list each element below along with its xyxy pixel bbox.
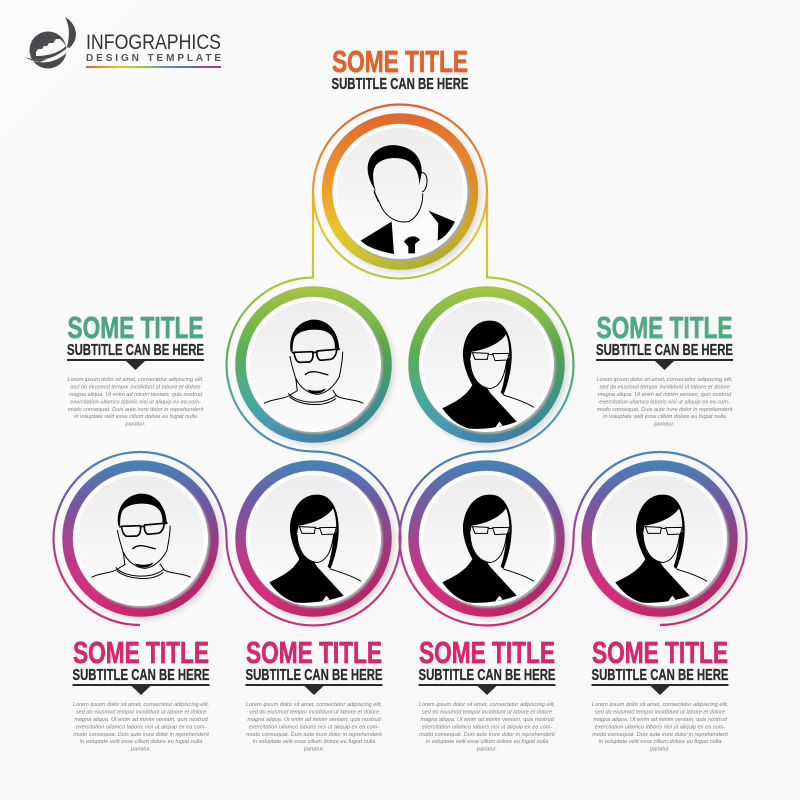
- top subtitle: SUBTITLE CAN BE HERE: [332, 76, 469, 93]
- icon: logo emblem: [25, 17, 76, 68]
- icon: woman with glasses: [442, 321, 534, 429]
- node: top manager: [325, 116, 481, 272]
- text block: bottom 2: [246, 635, 383, 753]
- node: bottom person 3: [412, 464, 568, 620]
- text block: middle left: SUBTITLE CAN BE HERE: [67, 342, 204, 359]
- text block: bottom 4: [592, 635, 729, 753]
- text block: bottom 2: SOME TITLE: [246, 635, 382, 670]
- node: middle left person: [238, 290, 394, 446]
- text block: bottom 3: SUBTITLE CAN BE HERE: [418, 667, 556, 684]
- top title: SOME TITLE: [332, 44, 468, 79]
- connector lines: [54, 104, 747, 626]
- node: bottom person 1: [66, 464, 222, 620]
- icon: man in suit: [361, 145, 455, 254]
- text block: middle right: [596, 310, 733, 428]
- text block: middle right: SOME TITLE: [596, 310, 732, 345]
- icon: woman with glasses: [615, 495, 707, 603]
- text block: middle left: SOME TITLE: [68, 310, 204, 345]
- text block: bottom 1: SUBTITLE CAN BE HERE: [72, 667, 210, 684]
- icon: man with glasses: [264, 320, 363, 404]
- icon: woman with glasses: [269, 495, 361, 603]
- text block: bottom 2: SUBTITLE CAN BE HERE: [246, 667, 383, 684]
- top heading: [332, 44, 469, 93]
- left spiral line: [54, 278, 400, 626]
- text block: bottom 1: [72, 635, 210, 753]
- node: bottom person 2: [238, 464, 394, 620]
- text block: bottom 4: SUBTITLE CAN BE HERE: [592, 667, 729, 684]
- logo: [25, 17, 221, 68]
- icon: man with glasses: [92, 494, 191, 578]
- logo title: INFOGRAPHICS: [86, 30, 221, 54]
- icon: woman with glasses: [442, 495, 534, 603]
- text block: middle right: SUBTITLE CAN BE HERE: [596, 342, 733, 359]
- node: middle right person: [412, 290, 568, 446]
- node: bottom person 4: [584, 464, 740, 620]
- text block: middle left: [67, 310, 204, 428]
- text block: bottom 3: SOME TITLE: [419, 635, 555, 670]
- logo subtitle: DESIGN TEMPLATE: [86, 53, 221, 64]
- right spiral line: [400, 278, 747, 626]
- text block: bottom 3: [418, 635, 556, 753]
- top ring with drop lines: [313, 104, 487, 278]
- text block: bottom 4: SOME TITLE: [592, 635, 728, 670]
- rainbow rule: [86, 66, 221, 68]
- text block: bottom 1: SOME TITLE: [73, 635, 209, 670]
